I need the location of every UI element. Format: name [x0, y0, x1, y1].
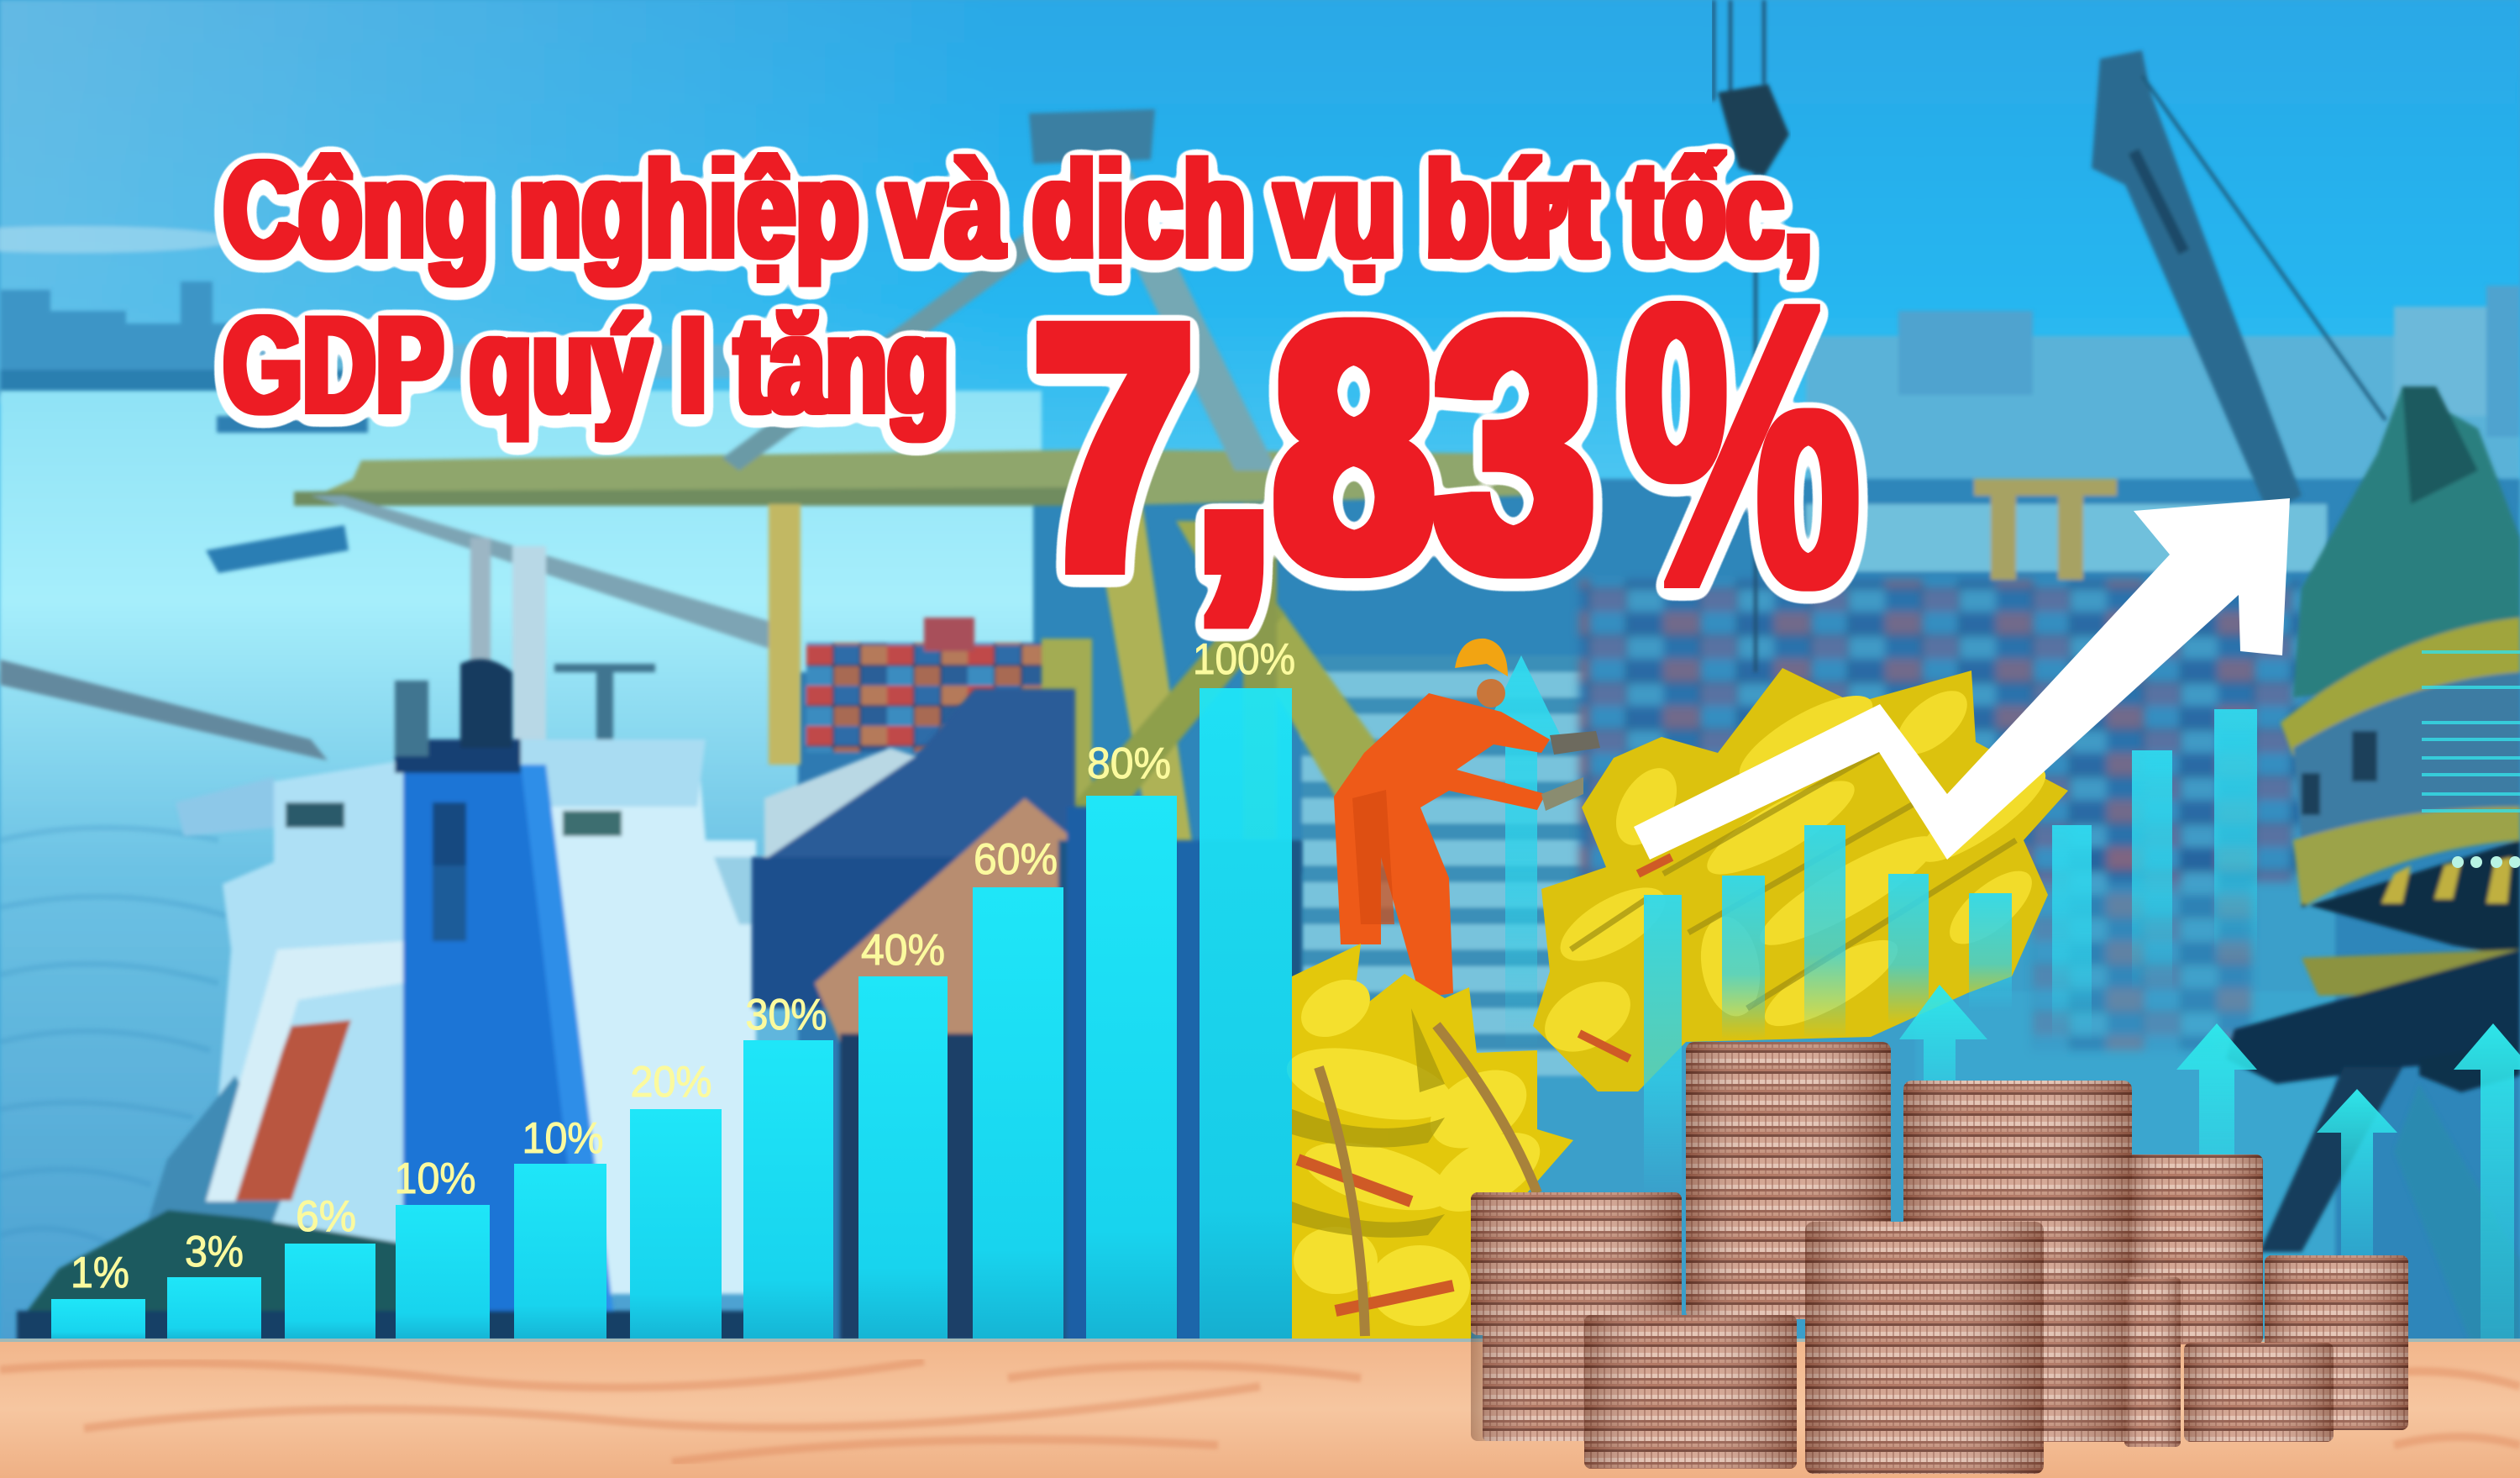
rice bags: hoisted pile [1532, 668, 2068, 1091]
coin stack: back right tall [1903, 1081, 2132, 1442]
bar value labels: 100% [1193, 635, 1295, 684]
bar value labels [71, 635, 1295, 1297]
distant skyline [0, 281, 2520, 504]
coin stack: front right [2184, 1343, 2334, 1442]
small boat [206, 416, 368, 573]
bar value labels: 80% [1087, 739, 1171, 788]
chart: translucent small bars [1644, 709, 2257, 1197]
chart: tall cyan bars behind the worker [1480, 655, 1562, 1050]
wooden table [0, 1339, 2520, 1478]
right crane cab [2226, 387, 2520, 1340]
coin stacks [1471, 1042, 2408, 1474]
sky [0, 0, 2520, 672]
bar value labels: 20% [630, 1058, 712, 1107]
white zig-zag growth arrow [1634, 498, 2290, 860]
bar value labels: 60% [974, 835, 1058, 884]
ship superstructure [17, 659, 865, 1344]
bar value labels: 1% [71, 1249, 129, 1297]
HUD dots [2452, 856, 2520, 868]
headline number: 7,83 [1033, 252, 1594, 643]
chart: growth bars with percentages [51, 635, 1295, 1340]
headline percent sign: % [1623, 219, 1861, 671]
water ripples [0, 828, 227, 1244]
rice bags: left pile [1280, 944, 1573, 1340]
coin stack: small right [2124, 1277, 2181, 1447]
gantry crane beam [0, 109, 1529, 865]
right crane arm [2092, 50, 2386, 513]
bar value labels: 10% [522, 1114, 603, 1163]
coin stack: left [1471, 1192, 1682, 1441]
bar value labels: 3% [185, 1228, 244, 1276]
bar value labels: 30% [746, 991, 827, 1039]
title line 2: GDP quý I tăng [223, 289, 949, 441]
coin stack: front left [1584, 1315, 1797, 1469]
HUD lines [2422, 652, 2520, 811]
title [223, 134, 1861, 671]
coin stack: front centre [1805, 1222, 2044, 1474]
port base [798, 479, 2520, 1344]
bar value labels: 10% [395, 1155, 475, 1203]
crane hook and cables [1714, 0, 1789, 672]
coin stack: right [2127, 1155, 2263, 1344]
bar value labels: 6% [296, 1192, 356, 1241]
water [0, 391, 1042, 1344]
coin stack: back tall [1686, 1042, 1891, 1319]
icon: cyan up arrows [1899, 985, 2520, 1340]
coin stack: far right [2265, 1255, 2408, 1430]
title line 1: Công nghiệp và dịch vụ bứt tốc, [223, 134, 1813, 286]
worker in orange [1334, 639, 1600, 998]
stacked containers behind bars [752, 689, 1302, 1353]
bar value labels: 40% [861, 926, 945, 975]
